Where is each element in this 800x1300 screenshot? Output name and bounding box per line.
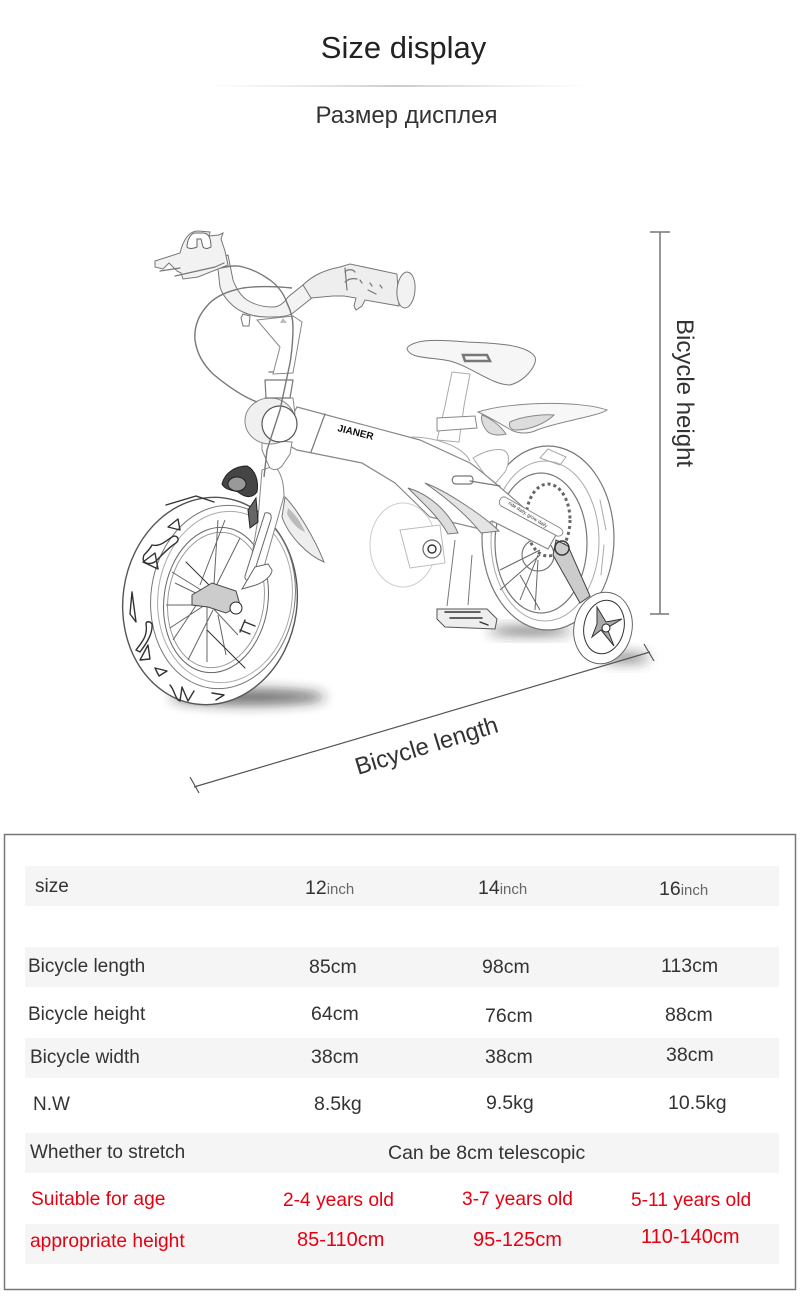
row: suitable for age: 2-4 years old [283, 1190, 394, 1211]
row: suitable for age: 3-7 years old [462, 1189, 573, 1210]
row: suitable for age [31, 1189, 751, 1211]
seat and seat post [407, 340, 535, 442]
row: net weight: N.W [33, 1094, 70, 1115]
frame: ride daily, grow daily [507, 501, 549, 530]
illustration: bicycle line drawing [109, 231, 650, 716]
rear wheel [482, 446, 614, 630]
row: appropriate height: 85-110cm [297, 1229, 384, 1251]
handlebar stem [257, 316, 302, 374]
ground shadows [170, 627, 650, 705]
row: size: size [35, 876, 69, 897]
crank and training wheel [437, 540, 590, 629]
bell and brake lever [155, 231, 228, 279]
row: bicycle height: 64cm [311, 1003, 359, 1025]
bicycle height dimension line [650, 232, 670, 614]
row: appropriate height [30, 1226, 740, 1252]
row: appropriate height: 110-140cm [641, 1226, 740, 1248]
row: size: 12inch [305, 877, 354, 899]
row: bicycle height: 88cm [665, 1004, 713, 1026]
row: bicycle height [28, 1003, 713, 1027]
title: Size display [321, 30, 487, 65]
row: net weight: 9.5kg [486, 1092, 534, 1114]
head tube [245, 372, 297, 470]
row: bicycle width: Bicycle width [30, 1047, 140, 1068]
handlebars [217, 255, 417, 326]
subtitle: Размер дисплея [316, 102, 497, 129]
panel: size table [4, 834, 796, 1290]
row: bicycle width [30, 1044, 714, 1068]
row: whether to stretch [30, 1142, 586, 1164]
bicycle length dimension line [190, 644, 654, 793]
row: whether to stretch: Whether to stretch [30, 1142, 185, 1163]
row: bicycle height: 76cm [485, 1005, 533, 1027]
row: suitable for age: 5-11 years old [631, 1190, 751, 1211]
front fender [282, 497, 324, 562]
row: net weight [33, 1092, 727, 1115]
row: bicycle width: 38cm [485, 1046, 533, 1068]
row: bicycle length [28, 955, 718, 978]
training wheel fairing [370, 503, 445, 587]
row: size: 16inch [659, 878, 708, 900]
row: net weight: 8.5kg [314, 1093, 362, 1115]
row: net weight: 10.5kg [668, 1092, 727, 1114]
row: size [35, 876, 708, 900]
water bottle shape [473, 449, 508, 486]
brake cables [177, 266, 293, 477]
row: size: 14inch [478, 877, 527, 899]
row: suitable for age: Suitable for age [31, 1189, 165, 1210]
row: bicycle width: 38cm [311, 1046, 359, 1068]
row: appropriate height: appropriate height [30, 1231, 185, 1252]
row: whether to stretch: Can be 8cm telescopic [388, 1142, 586, 1164]
row: appropriate height: 95-125cm [473, 1229, 562, 1251]
row: bicycle length: 98cm [482, 956, 530, 978]
row: bicycle width: 38cm [666, 1044, 714, 1066]
training wheel [567, 587, 639, 669]
rear fender [478, 403, 607, 435]
row: bicycle length: 85cm [309, 956, 357, 978]
row: bicycle height: Bicycle height [28, 1004, 146, 1025]
frame [279, 407, 563, 549]
bicycle height label: Bicycle height [671, 319, 698, 467]
bicycle length label: Bicycle length [352, 712, 501, 781]
fork and front hub [192, 466, 284, 634]
row: bicycle length: 113cm [661, 955, 718, 977]
front wheel [109, 486, 311, 716]
frame: JIANER [336, 423, 375, 443]
row: bicycle length: Bicycle length [28, 956, 145, 977]
